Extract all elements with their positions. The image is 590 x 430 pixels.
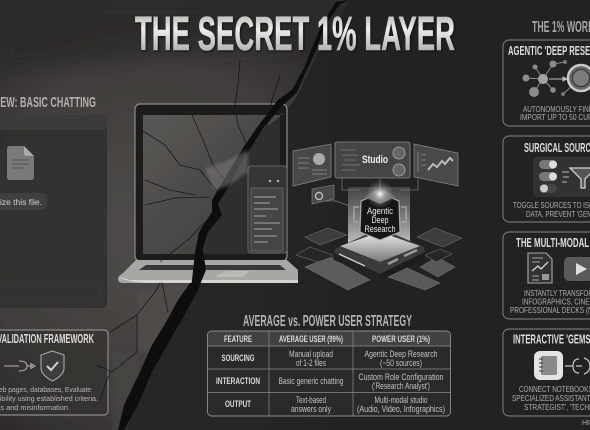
row: interaction — [216, 372, 444, 391]
heading: strategy table: AVERAGE vs. POWER USER STRATEGY — [243, 313, 412, 330]
icon: node network to lens — [522, 60, 590, 97]
shard highlight — [205, 150, 248, 190]
panel: validation framework — [0, 330, 108, 415]
row: output: Multi-modal studio — [374, 395, 428, 405]
row: sourcing: (~50 sources) — [380, 358, 422, 368]
row: interaction: INTERACTION — [216, 376, 260, 386]
row: sourcing: SOURCING — [222, 353, 255, 363]
icon: shield check — [41, 351, 64, 381]
row: sourcing: Agentic Deep Research — [364, 349, 438, 359]
row: interaction: ('Research Analyst') — [372, 381, 430, 391]
panel: right floating chart — [414, 144, 458, 186]
laptop lid — [135, 104, 287, 261]
panel: multi-modal studio — [503, 232, 590, 319]
row: interaction: Basic generic chatting — [278, 376, 344, 386]
row: sourcing — [222, 349, 438, 368]
panel: Studio main screen — [335, 142, 410, 178]
table header — [224, 336, 430, 344]
hairline cracks — [97, 60, 280, 400]
base unit — [333, 234, 425, 274]
table: average vs power user — [208, 331, 450, 416]
icon: toggles and funnel — [533, 157, 590, 197]
icon: merge arrow — [4, 361, 35, 371]
core: Agentic Deep Research: Research — [364, 224, 396, 234]
table header: POWER USER (1%) — [372, 334, 430, 344]
validation description — [0, 386, 98, 410]
icon: report — [528, 253, 552, 283]
small floating widget — [312, 185, 334, 204]
laptop — [118, 104, 298, 283]
icon: video play — [564, 257, 590, 281]
light column — [348, 187, 410, 245]
keyboard — [139, 265, 286, 270]
icon: notebook — [534, 351, 563, 380]
row: output — [225, 395, 445, 414]
studio hub illustration — [293, 142, 462, 290]
panel: interactive gems — [503, 329, 590, 416]
icon: connector plug — [565, 358, 590, 374]
row: output: (Audio, Video, Infographics) — [357, 404, 445, 414]
connectors — [316, 178, 418, 206]
panel: basic chatting window — [0, 115, 107, 308]
crack: main fissure — [118, 0, 350, 430]
core: Agentic Deep Research: Agentic — [367, 206, 394, 216]
table header: AVERAGE USER (99%) — [279, 334, 343, 344]
panel: agentic deep research — [503, 40, 590, 126]
core: Agentic Deep Research — [354, 180, 406, 240]
row: output: answers only — [291, 404, 331, 414]
chat bubble — [0, 193, 47, 210]
panel: surgical source control — [503, 136, 590, 222]
row: output: Text-based — [296, 395, 326, 405]
floor tiles — [296, 228, 462, 290]
background: dark stone wall — [0, 0, 350, 430]
laptop screen — [143, 115, 280, 254]
screen window: chat — [248, 166, 287, 253]
row: sourcing: Manual upload — [289, 349, 333, 359]
row: sourcing: of 1-2 files — [296, 358, 326, 368]
row: interaction: Custom Role Configuration — [358, 372, 444, 382]
core: Agentic Deep Research: Deep — [372, 215, 389, 225]
panel: left floating screen — [293, 144, 331, 186]
icon: document — [7, 146, 34, 180]
panel: Studio main screen: Studio — [362, 154, 388, 166]
laptop base — [118, 260, 298, 283]
row: output: OUTPUT — [225, 399, 251, 409]
crack: over laptop — [190, 90, 297, 292]
table header: FEATURE — [224, 334, 252, 344]
